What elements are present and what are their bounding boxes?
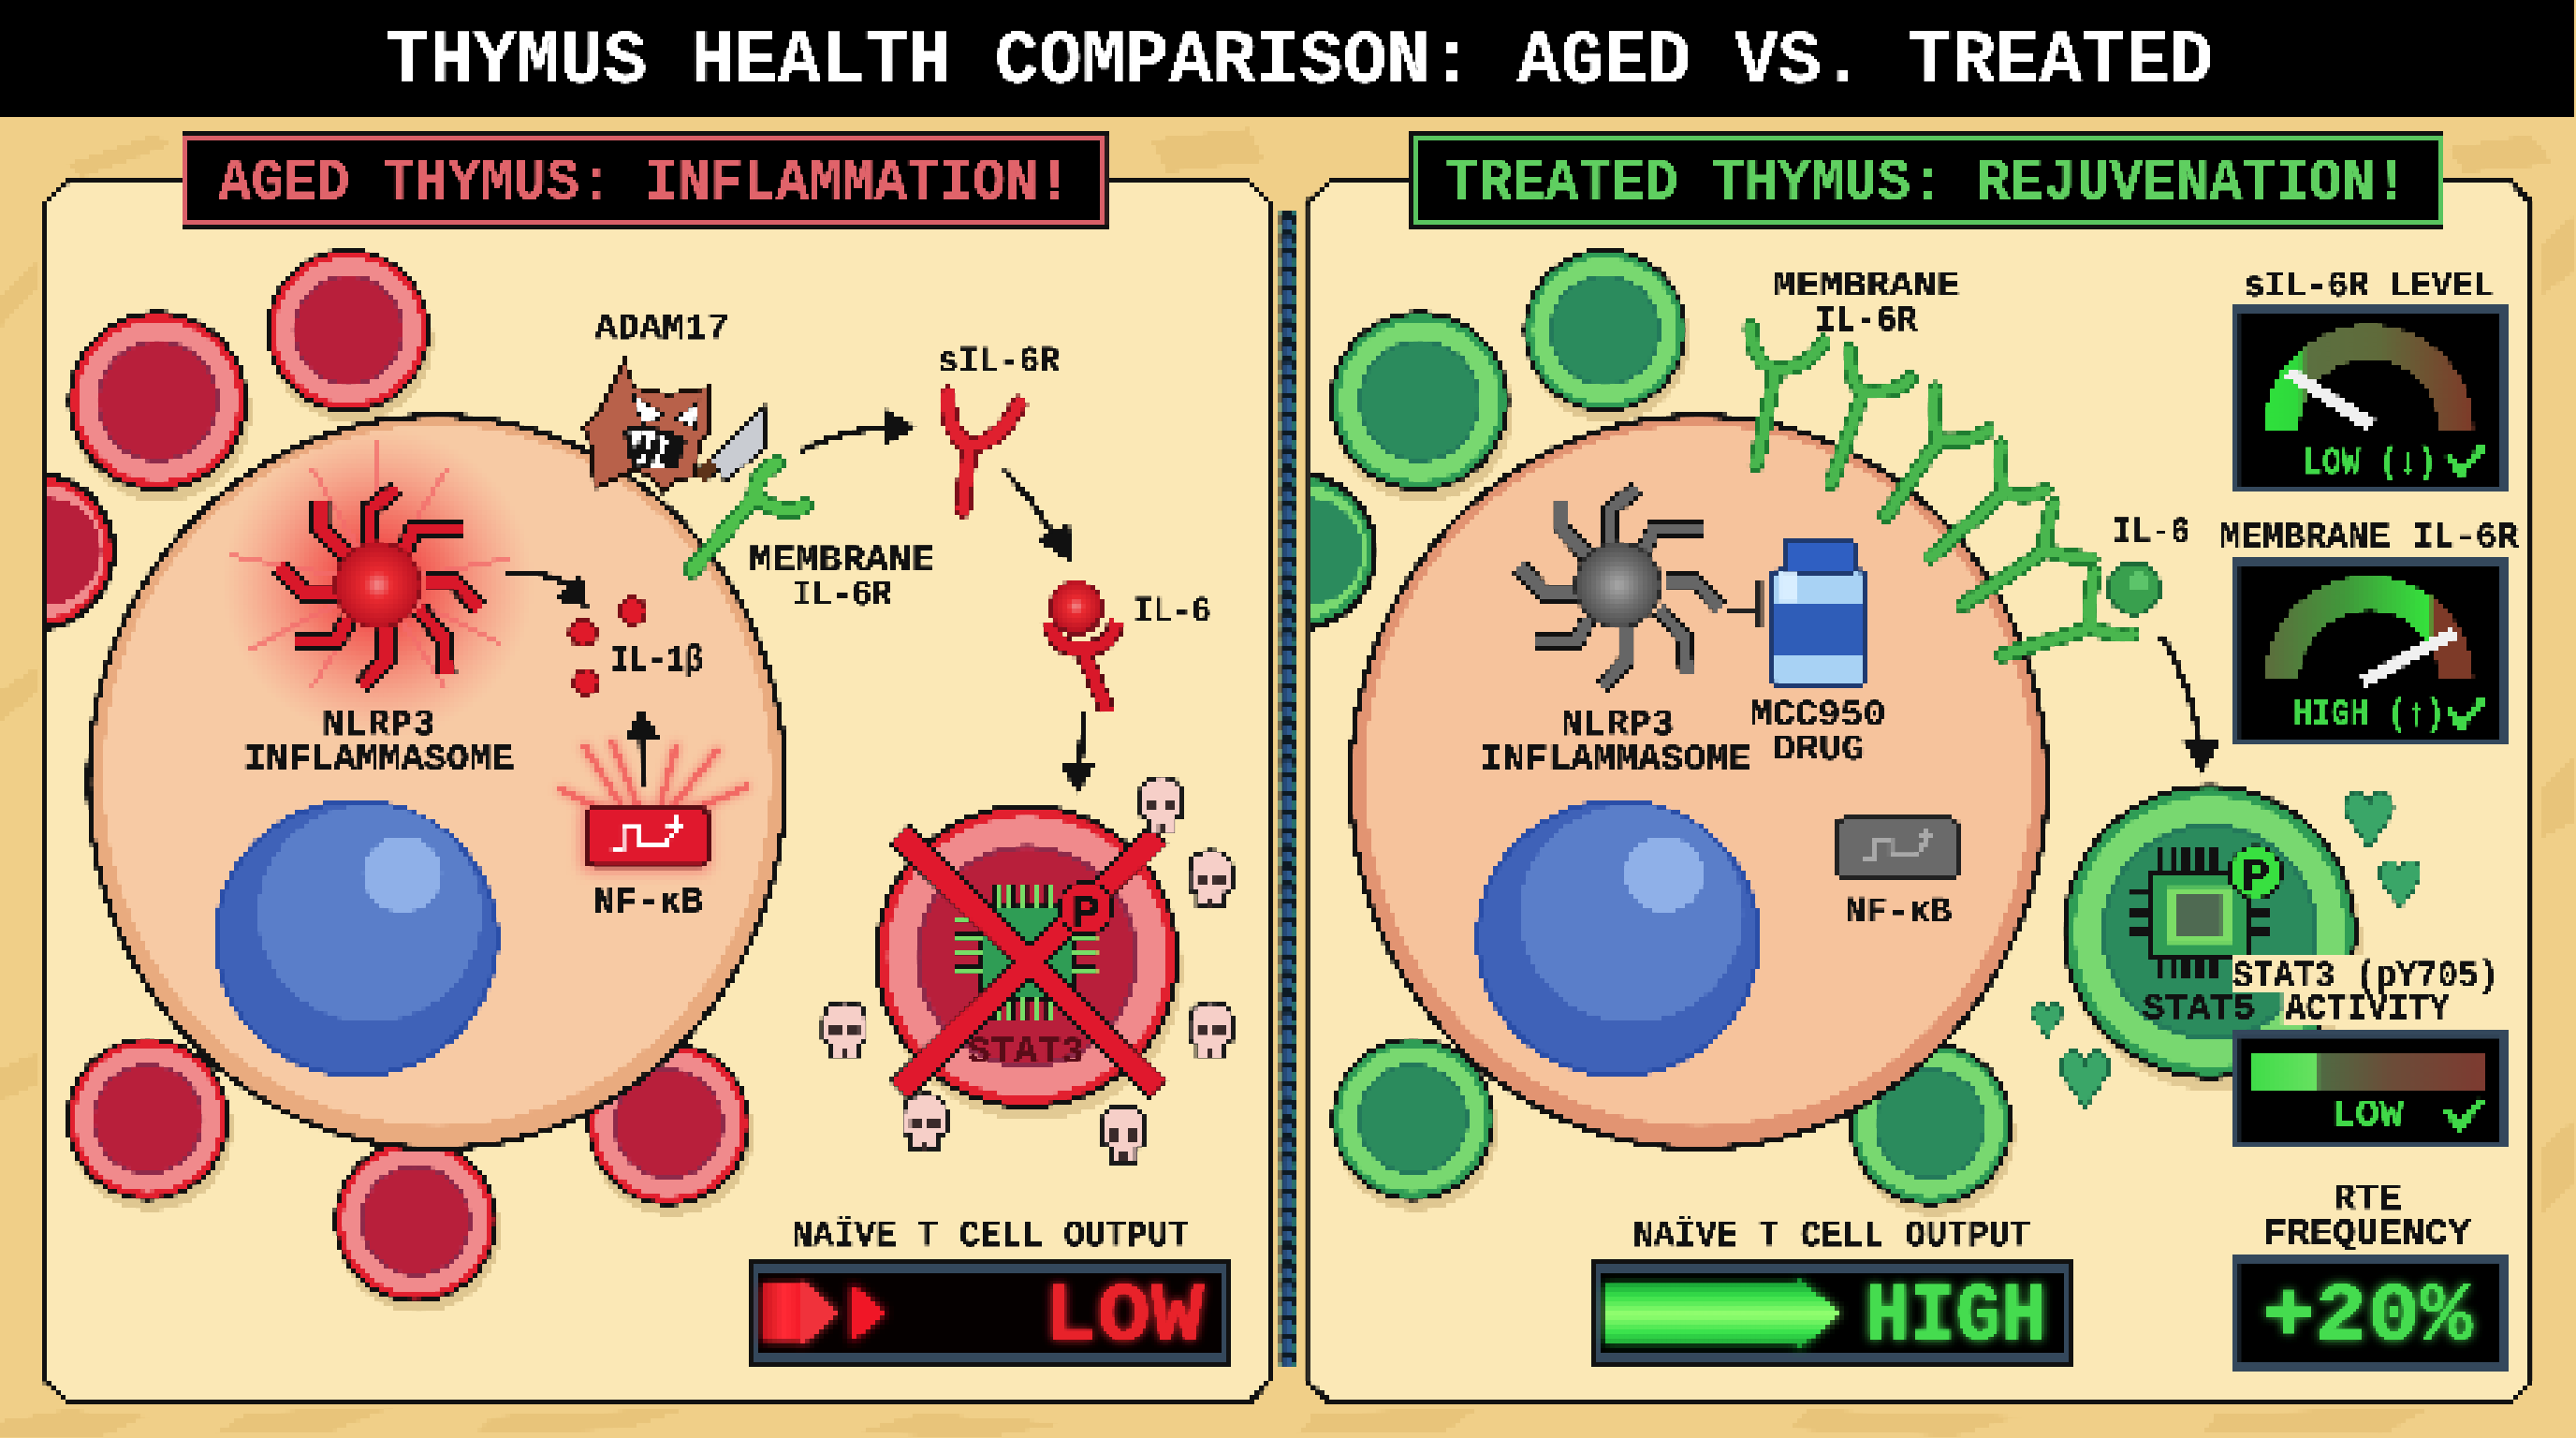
label: NLRP3 inflammasome, treated: INFLAMMASOME	[1480, 739, 1751, 780]
value: HIGH output: HIGH	[1865, 1271, 2047, 1364]
title bar	[0, 0, 2576, 117]
arrow: sIL-6R to IL-6	[1003, 470, 1071, 564]
icon: NF-kB inactive	[1837, 818, 1958, 879]
label: NF-kB, aged: NF-κB	[593, 882, 703, 923]
label: membrane IL-6R, aged	[749, 540, 935, 616]
icon: NF-kB active	[559, 740, 749, 873]
label: RTE frequency	[2264, 1180, 2472, 1255]
value: LOW output: LOW	[1043, 1271, 1205, 1364]
label: STAT3: STAT3	[968, 1032, 1084, 1073]
nucleus, aged	[213, 799, 500, 1078]
icon: NLRP3 inflammasome (inactive)	[1519, 488, 1720, 687]
label: IL-6, treated: IL-6	[2113, 512, 2190, 553]
red cross	[909, 843, 1150, 1081]
chip	[956, 884, 1097, 1022]
green blood cells, treated	[1310, 248, 2016, 1216]
arrow: ADAM17 to sIL-6R	[800, 407, 916, 452]
label: membrane IL-6R, aged: MEMBRANE	[749, 540, 935, 581]
icon: membrane IL-6R	[692, 463, 805, 570]
gauge reading: high: HIGH (↑)	[2293, 694, 2445, 737]
label: ADAM17: ADAM17	[594, 309, 729, 350]
gauge reading: low: LOW (↓)	[2304, 442, 2437, 485]
label: RTE frequency: FREQUENCY	[2264, 1214, 2472, 1255]
icons: skulls	[823, 777, 1232, 1162]
label: NLRP3 inflammasome, treated: NLRP3	[1560, 705, 1674, 746]
heading: treated thymus: TREATED THYMUS: REJUVENATION!	[1445, 149, 2408, 216]
label: STAT3 activity: STAT3 (pY705)	[2232, 956, 2499, 997]
icon: IL-6 bound to receptor	[1048, 580, 1117, 712]
label: STAT5: STAT5	[2143, 989, 2256, 1030]
arrow: NF-kB to IL-1 beta	[624, 707, 661, 788]
icon: inactive STAT3 cell	[874, 803, 1183, 1121]
label: sIL-6R: sIL-6R	[938, 342, 1061, 383]
meter: STAT3 activity low	[2236, 1034, 2504, 1145]
header frame: treated thymus	[1410, 131, 2445, 228]
value: +20%: +20%	[2262, 1271, 2473, 1364]
meter reading: low: LOW	[2331, 1094, 2405, 1137]
arrow: IL-6 to STAT3	[1060, 713, 1096, 795]
arrow: NLRP3 to IL-1 beta	[505, 572, 588, 608]
label: MCC950 drug	[1749, 695, 1886, 770]
icon: active STAT cell	[2062, 784, 2363, 1091]
label: membrane IL-6R, treated: IL-6R	[1815, 301, 1918, 342]
large cell, aged	[89, 416, 785, 1149]
phospho badge	[2228, 844, 2284, 901]
label: NLRP3 inflammasome, aged: INFLAMMASOME	[243, 739, 514, 780]
label: RTE frequency: RTE	[2333, 1180, 2402, 1221]
label: STAT3 activity: ACTIVITY	[2285, 989, 2451, 1030]
heading: aged thymus: AGED THYMUS: INFLAMMATION!	[218, 149, 1071, 216]
label: MCC950 drug: MCC950	[1749, 695, 1886, 736]
meter frame: naive T cell output low	[748, 1258, 1232, 1367]
label: naive T cell output, treated: NAÏVE T CELL OUTPUT	[1633, 1215, 2030, 1256]
icon: NLRP3 inflammasome (active)	[222, 427, 534, 740]
label: NLRP3 inflammasome, treated	[1480, 705, 1751, 780]
label: STAT3 activity	[2232, 956, 2499, 1030]
label: NLRP3 inflammasome, aged	[243, 705, 514, 780]
label: NLRP3 inflammasome, aged: NLRP3	[322, 705, 435, 746]
icon: IL-1 beta particles	[570, 598, 646, 695]
label: membrane IL-6R, treated: MEMBRANE	[1773, 266, 1960, 307]
label: IL-1 beta: IL-1β	[611, 640, 703, 682]
panel background	[44, 181, 1270, 1403]
label: IL-6, aged: IL-6	[1134, 591, 1211, 632]
label: NF-kB, treated: NF-κB	[1845, 892, 1952, 933]
arrow: IL-6 to STAT	[2160, 634, 2221, 775]
panel: treated thymus	[1306, 181, 2532, 1403]
gauge: sIL-6R level low	[2236, 309, 2504, 490]
red blood cells, aged	[48, 248, 754, 1313]
chip	[2128, 846, 2271, 977]
label: naive T cell output, aged: NAÏVE T CELL OUTPUT	[792, 1215, 1190, 1256]
icon: IL-6 green	[2106, 560, 2162, 616]
label: membrane IL-6R gauge: MEMBRANE IL-6R	[2219, 517, 2519, 558]
icon: soluble IL-6R	[948, 394, 1018, 509]
stat frame: RTE frequency	[2236, 1258, 2504, 1367]
panel background	[1306, 181, 2532, 1403]
badge letter: P, aged: P	[1071, 888, 1101, 941]
label backing: STAT3 activity	[2232, 956, 2509, 1027]
label: membrane IL-6R, treated	[1773, 266, 1960, 342]
title: THYMUS HEALTH COMPARISON: AGED VS. TREATED	[386, 21, 2213, 106]
panel: aged thymus	[44, 181, 1270, 1403]
divider between panels	[1280, 211, 1298, 1365]
header frame: aged thymus	[181, 131, 1109, 228]
badge letter: P, treated: P	[2241, 852, 2271, 904]
icons: membrane IL-6R receptors	[1751, 327, 2132, 655]
label: membrane IL-6R, aged: IL-6R	[792, 575, 893, 616]
label: sIL-6R level: sIL-6R LEVEL	[2244, 266, 2494, 307]
meter frame: naive T cell output high	[1590, 1258, 2075, 1367]
phospho badge	[1058, 881, 1114, 936]
icon: inhibition bar	[1728, 581, 1760, 627]
icon: ADAM17 monster with knife	[583, 360, 766, 493]
nucleus, treated	[1475, 799, 1761, 1078]
icons: hearts	[2032, 792, 2421, 1108]
label: MCC950 drug: DRUG	[1773, 729, 1865, 770]
gauge: membrane IL-6R high	[2236, 562, 2504, 742]
large cell, treated	[1351, 416, 2047, 1149]
icon: MCC950 drug bottle	[1771, 540, 1866, 685]
